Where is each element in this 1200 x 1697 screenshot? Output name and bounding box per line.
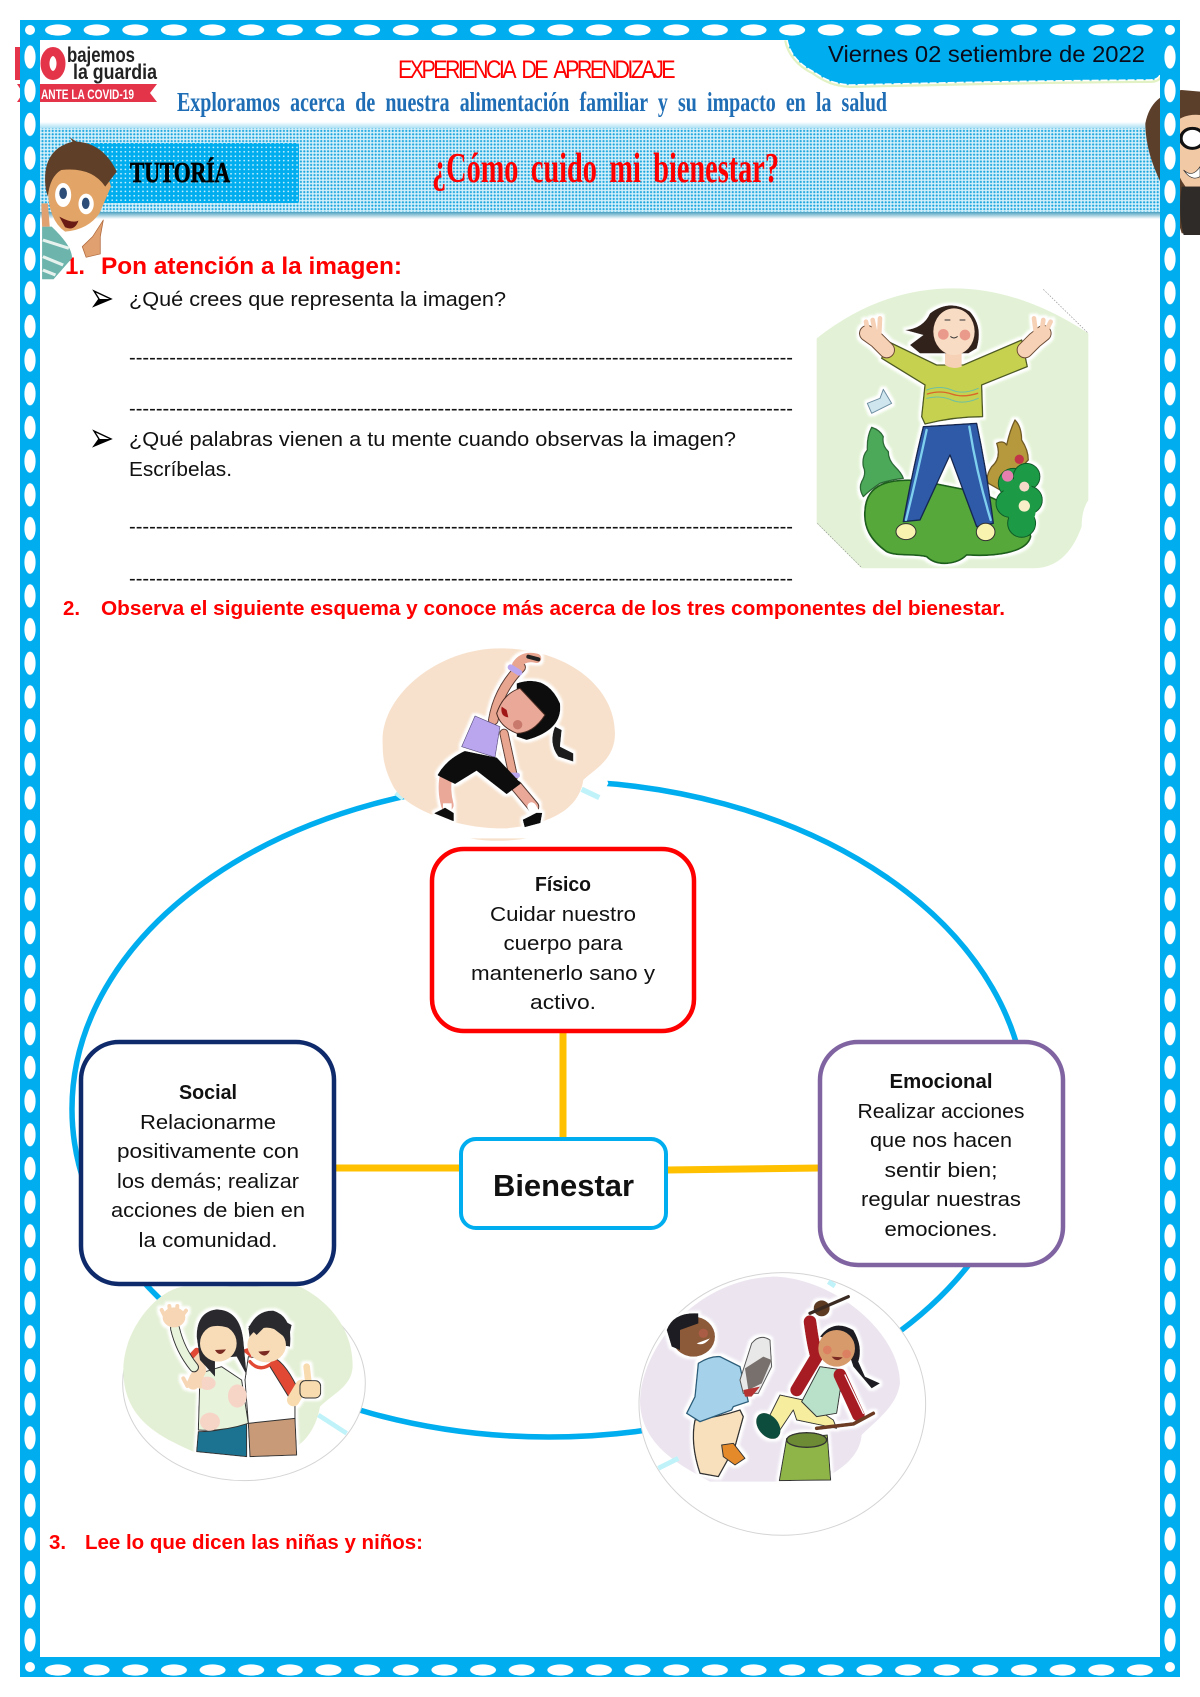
box: Emocional: regular nuestras (861, 1188, 1021, 1211)
answer line: --------------------------------------------------------------------------------------------------- (129, 515, 793, 538)
logo: bajemos la guardia (15, 44, 157, 102)
heading: ¿Cómo cuido mi bienestar?: ¿Cómo cuido mi bienestar? (432, 146, 779, 192)
date tab: Viernes 02 setiembre de 2022 (828, 41, 1145, 67)
section 2 heading: Observa el siguiente esquema y conoce más acerca de los tres componentes del bienestar. (101, 597, 1005, 620)
section 3 heading: Lee lo que dicen las niñas y niños: (85, 1531, 423, 1554)
box: Físico: Físico (535, 873, 591, 896)
date tab (787, 40, 1160, 85)
box: Emocional: Realizar acciones (858, 1100, 1024, 1123)
logo: bajemos la guardia: ANTE LA COVID-19 (41, 86, 134, 102)
title banner: dotted band (40, 122, 1160, 219)
answer line: --------------------------------------------------------------------------------------------------- (129, 346, 793, 369)
character: boy pointing (41, 137, 117, 279)
box: Social: Relacionarme (140, 1111, 276, 1134)
box: Físico: mantenerlo sano y (471, 962, 656, 985)
connector: Emocional to Bienestar (667, 1168, 820, 1170)
tab: TUTORÍA (82, 143, 299, 203)
box: Emocional: sentir bien; (884, 1159, 998, 1182)
answer line: --------------------------------------------------------------------------------------------------- (129, 397, 793, 420)
diagram ring (72, 781, 1026, 1437)
section 2 heading: 2. (63, 597, 80, 620)
answer line: --------------------------------------------------------------------------------------------------- (129, 567, 793, 590)
logo: bajemos la guardia: la guardia (73, 61, 157, 84)
box: Emocional: que nos hacen (870, 1129, 1012, 1152)
icon: arrow bullet (94, 291, 111, 306)
section 1 heading: Pon atención a la imagen: (101, 253, 402, 280)
heading: experiencia de aprendizaje: EXPERIENCIA DE APRENDIZAJE (398, 56, 675, 84)
illustration: girl with open arms (817, 288, 1088, 568)
box: Emocional (820, 1042, 1063, 1265)
box: Bienestar (461, 1139, 666, 1228)
box: Físico: cuerpo para (504, 932, 623, 955)
box: Social: la comunidad. (138, 1229, 278, 1252)
icon: arrow bullet (94, 431, 111, 446)
connector: Físico to Bienestar (560, 1031, 566, 1138)
box: Social: acciones de bien en (111, 1199, 305, 1222)
box: Social (81, 1042, 334, 1284)
section 1 heading: 1. (65, 253, 85, 280)
question 2 block: Escríbelas. (129, 458, 232, 481)
box: Social: los demás; realizar (117, 1170, 299, 1193)
question 2 block: ¿Qué palabras vienen a tu mente cuando observas la imagen? (129, 428, 736, 451)
illustration: emotional wellbeing, children making music (639, 1273, 926, 1535)
box: Físico: Cuidar nuestro (490, 903, 636, 926)
box: Bienestar: Bienestar (493, 1168, 634, 1203)
box: Físico: activo. (530, 991, 596, 1014)
box: Emocional: Emocional (890, 1070, 992, 1093)
section 3 heading: 3. (49, 1531, 66, 1554)
box: Físico (432, 849, 694, 1031)
teacher character peeking from right (1145, 90, 1200, 235)
illustration: physical wellbeing, girl stretching (383, 648, 615, 841)
box: Social: positivamente con (117, 1140, 299, 1163)
question 2 block (94, 428, 736, 481)
box: Social: Social (179, 1081, 237, 1104)
box: Emocional: emociones. (884, 1218, 998, 1241)
illustration: social wellbeing, two friends (123, 1286, 365, 1481)
question 1 block: ¿Qué crees que representa la imagen? (129, 288, 506, 311)
tab: TUTORÍA: TUTORÍA (130, 158, 231, 189)
subtitle: Exploramos acerca de nuestra alimentación familiar y su impacto en la salud (177, 87, 887, 117)
connector: Social to Bienestar (334, 1164, 461, 1172)
logo: bajemos la guardia: bajemos (67, 44, 135, 67)
